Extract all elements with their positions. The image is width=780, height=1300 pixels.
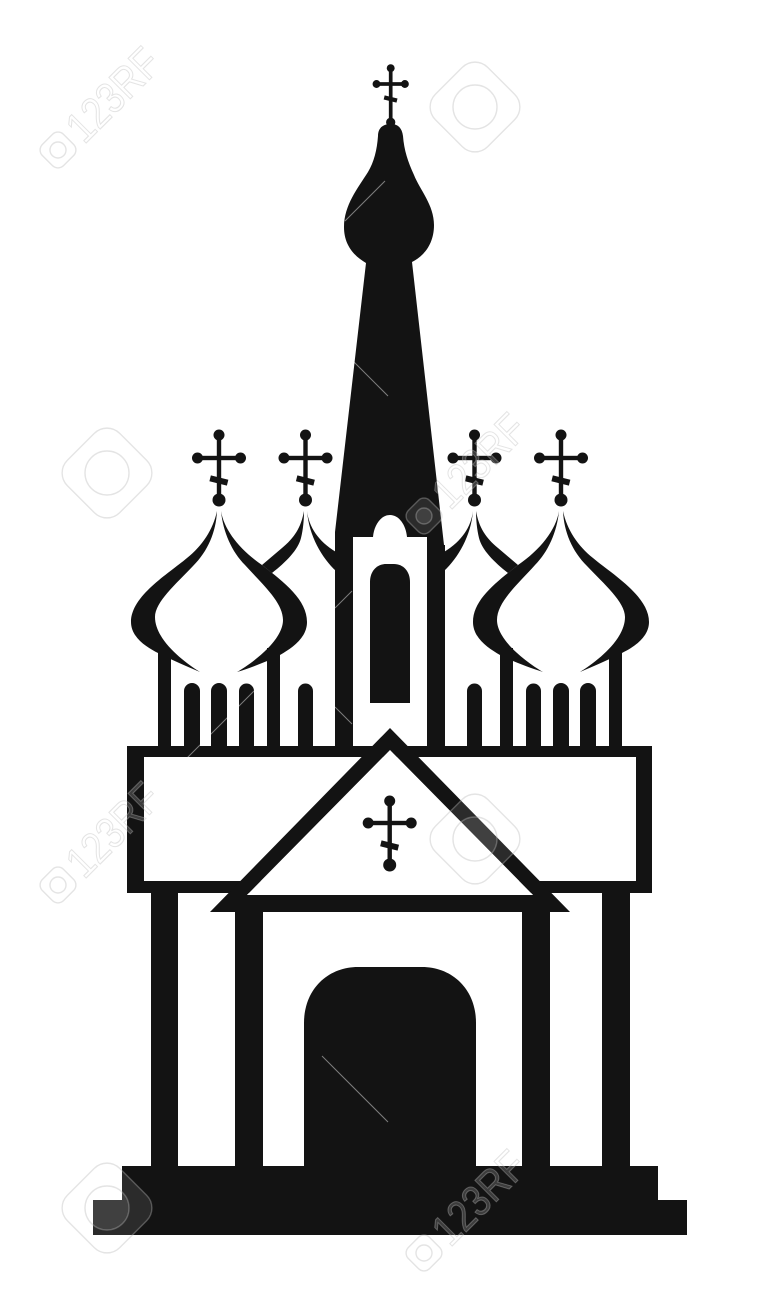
inner dome: right crescent xyxy=(307,511,336,571)
hairline marks across black areas xyxy=(185,181,388,1122)
watermark: bottom centre xyxy=(396,1141,536,1281)
drum columns xyxy=(158,650,171,748)
watermark: mid left xyxy=(30,773,170,913)
cross: inner right dome xyxy=(448,430,502,506)
inner dome: left crescent xyxy=(262,511,304,573)
bell tower window xyxy=(370,564,410,703)
pediment xyxy=(210,728,570,912)
cross: top of spire xyxy=(373,64,409,127)
watermark: bottom centre: 123RF xyxy=(423,1141,536,1255)
cross: inner left dome xyxy=(278,430,332,506)
outer dome: crescent xyxy=(473,511,559,672)
watermark: mid left: 123RF xyxy=(57,773,170,887)
outer dome: right crescent xyxy=(221,511,307,672)
lower columns xyxy=(151,885,630,1170)
watermark: mid centre camera xyxy=(423,787,527,891)
watermark: centre on spire: 123RF xyxy=(423,404,536,518)
watermark: top left: 123RF xyxy=(57,38,170,152)
watermark: top left xyxy=(30,38,170,178)
cross: outer right dome xyxy=(534,430,588,506)
inner dome: crescent xyxy=(476,511,518,573)
plinth xyxy=(93,1166,687,1235)
cross: outer left dome xyxy=(192,430,246,506)
watermark: centre on spire xyxy=(396,404,536,544)
outer dome: left crescent xyxy=(131,511,217,672)
watermark: bottom left camera xyxy=(55,1156,159,1260)
white pediment interior backing xyxy=(247,750,533,895)
watermark: top centre camera xyxy=(423,55,527,159)
inner dome: crescent xyxy=(444,511,473,571)
outer dome: crescent xyxy=(563,511,649,672)
bell tower white panel with arch xyxy=(353,515,427,746)
drum columns xyxy=(609,650,622,748)
cross: pediment xyxy=(363,796,417,872)
church building xyxy=(93,64,687,1235)
entablature box xyxy=(127,746,652,893)
door xyxy=(304,967,476,1170)
bell tower frame xyxy=(335,545,445,750)
drum niches xyxy=(580,683,596,748)
drum niches xyxy=(184,683,200,748)
right domes group xyxy=(444,430,649,748)
watermark: left camera xyxy=(55,421,159,525)
spire with main onion dome xyxy=(335,124,445,560)
left domes group xyxy=(131,430,336,748)
